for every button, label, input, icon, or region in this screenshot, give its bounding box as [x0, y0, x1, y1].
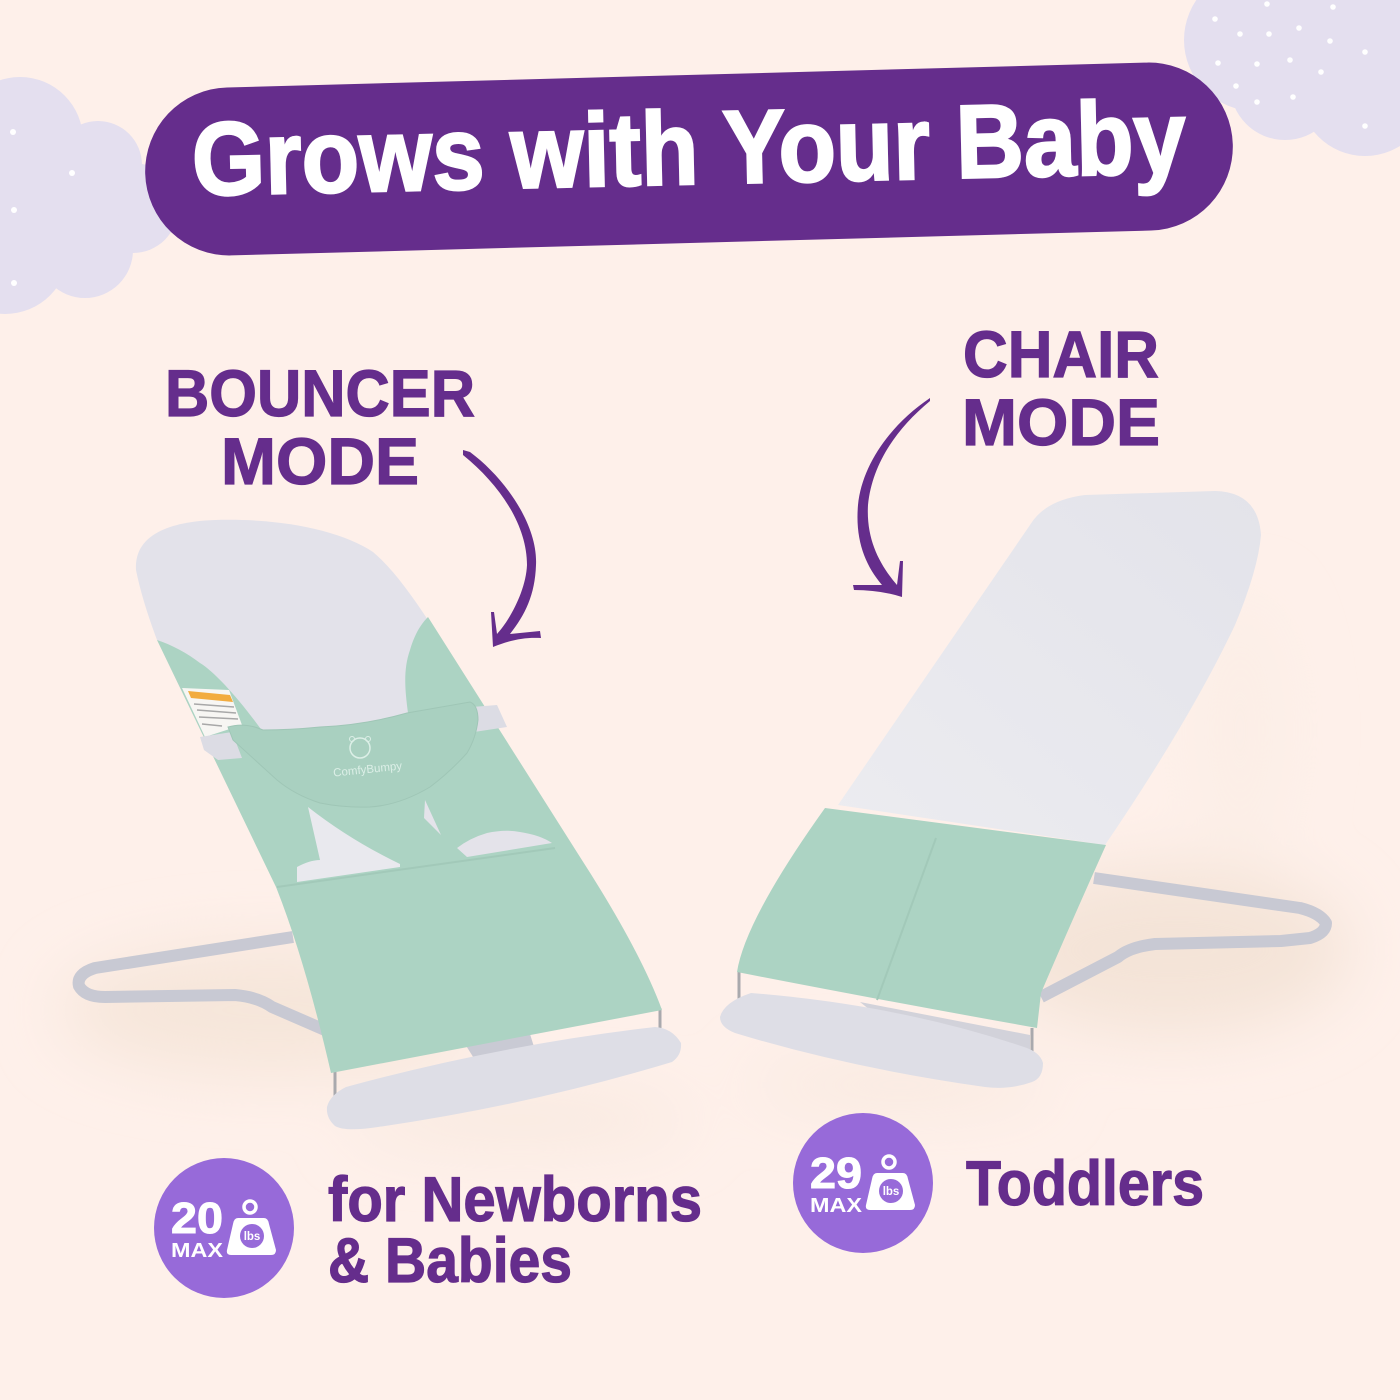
frame: [1041, 878, 1326, 997]
frame: [79, 937, 325, 1030]
badge: 20 lbs: 20: [171, 1194, 223, 1243]
text: toddlers: Toddlers: [966, 1149, 1204, 1219]
cloud: left: [0, 77, 178, 314]
badge: 20 lbs: MAX: [171, 1240, 224, 1262]
harness straps: [200, 732, 242, 760]
badge: 29 lbs: MAX: [810, 1195, 863, 1217]
mechanism: [860, 1002, 1030, 1050]
mesh head area: [136, 520, 560, 850]
label: chair mode second line: MODE: [962, 385, 1160, 459]
badge: 29 lbs: 29: [810, 1149, 862, 1198]
cloud: top right: [1184, 0, 1400, 156]
warning label: [182, 688, 242, 737]
harness pad: [228, 702, 478, 807]
text: newborns: for Newborns: [328, 1165, 702, 1235]
pocket line: [277, 848, 555, 887]
footrest base: [327, 1027, 681, 1129]
mesh back: [838, 491, 1261, 845]
arrow: bouncer: [463, 450, 541, 647]
floor shadows: [60, 600, 1350, 1140]
green fabric: [737, 808, 1106, 1028]
logo: [333, 736, 403, 780]
mesh cutouts: [297, 807, 400, 882]
icon: weight: lbs: [244, 1231, 260, 1243]
mechanism: [465, 1034, 535, 1060]
text: babies: & Babies: [328, 1226, 572, 1296]
footrest base: [720, 993, 1043, 1088]
rods: [739, 972, 1032, 1066]
icon: weight: lbs: [883, 1186, 899, 1198]
logo: ComfyBumpy: [333, 760, 403, 780]
harness strap right: [472, 705, 507, 732]
green fabric: [157, 617, 662, 1073]
badge: 20 lbs: [154, 1158, 294, 1298]
title banner: [143, 60, 1235, 258]
label: chair mode: CHAIR: [963, 317, 1159, 391]
fabric seam: [877, 838, 936, 1000]
label: bouncer mode: BOUNCER: [165, 356, 475, 430]
label: bouncer mode second line: MODE: [221, 424, 419, 498]
arrow: chair: [853, 398, 930, 597]
badge: 29 lbs: [793, 1113, 933, 1253]
product: chair seat: [720, 491, 1326, 1088]
title: Grows with Your Baby: [191, 80, 1187, 218]
product: bouncer seat: [79, 520, 681, 1129]
rods: [335, 1008, 660, 1104]
